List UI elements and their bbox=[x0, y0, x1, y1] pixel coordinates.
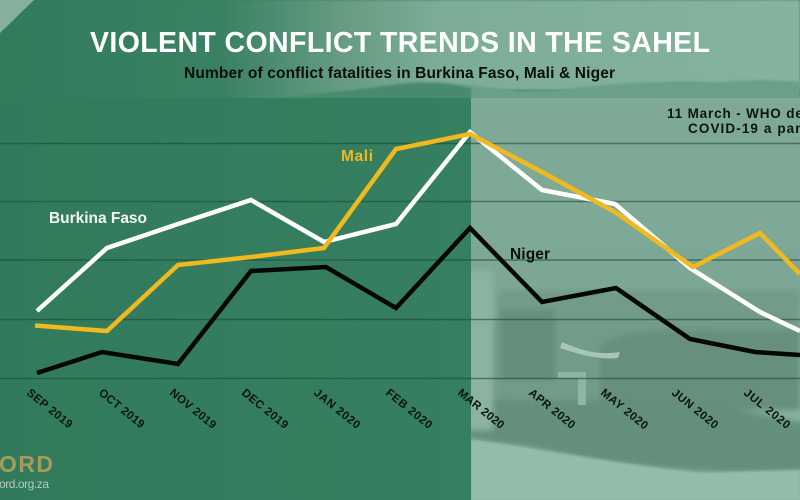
x-axis month labels: APR 2020 bbox=[526, 387, 577, 432]
x-axis month labels bbox=[24, 387, 792, 432]
x-axis month labels: JAN 2020 bbox=[311, 387, 362, 432]
x-axis month labels: JUN 2020 bbox=[669, 387, 720, 432]
line: Niger bbox=[37, 228, 800, 373]
label: Mali: Mali bbox=[341, 148, 373, 165]
x-axis month labels: DEC 2019 bbox=[239, 387, 290, 432]
line: Mali bbox=[35, 134, 800, 331]
annotation: WHO declaration bbox=[667, 106, 800, 136]
x-axis month labels: MAR 2020 bbox=[455, 387, 506, 432]
title: VIOLENT CONFLICT TRENDS IN THE SAHEL bbox=[90, 27, 710, 59]
line: Burkina Faso bbox=[37, 132, 800, 331]
x-axis month labels: FEB 2020 bbox=[383, 387, 434, 432]
panel: post-pandemic period bbox=[465, 98, 800, 500]
label: Burkina Faso: Burkina Faso bbox=[49, 210, 147, 227]
label: Niger: Niger bbox=[510, 246, 550, 263]
logo text: ORD bbox=[0, 451, 53, 477]
x-axis month labels: MAY 2020 bbox=[598, 387, 650, 432]
background bbox=[0, 0, 800, 98]
x-axis month labels: NOV 2019 bbox=[167, 387, 218, 432]
grid lines bbox=[0, 144, 800, 378]
x-axis month labels: JUL 2020 bbox=[741, 387, 792, 432]
logo text: ord.org.za bbox=[0, 477, 49, 491]
x-axis month labels: OCT 2019 bbox=[96, 387, 146, 431]
x-axis month labels: SEP 2019 bbox=[24, 387, 74, 431]
logo text bbox=[0, 451, 53, 491]
subtitle: Number of conflict fatalities in Burkina Faso, Mali & Niger bbox=[184, 65, 615, 82]
